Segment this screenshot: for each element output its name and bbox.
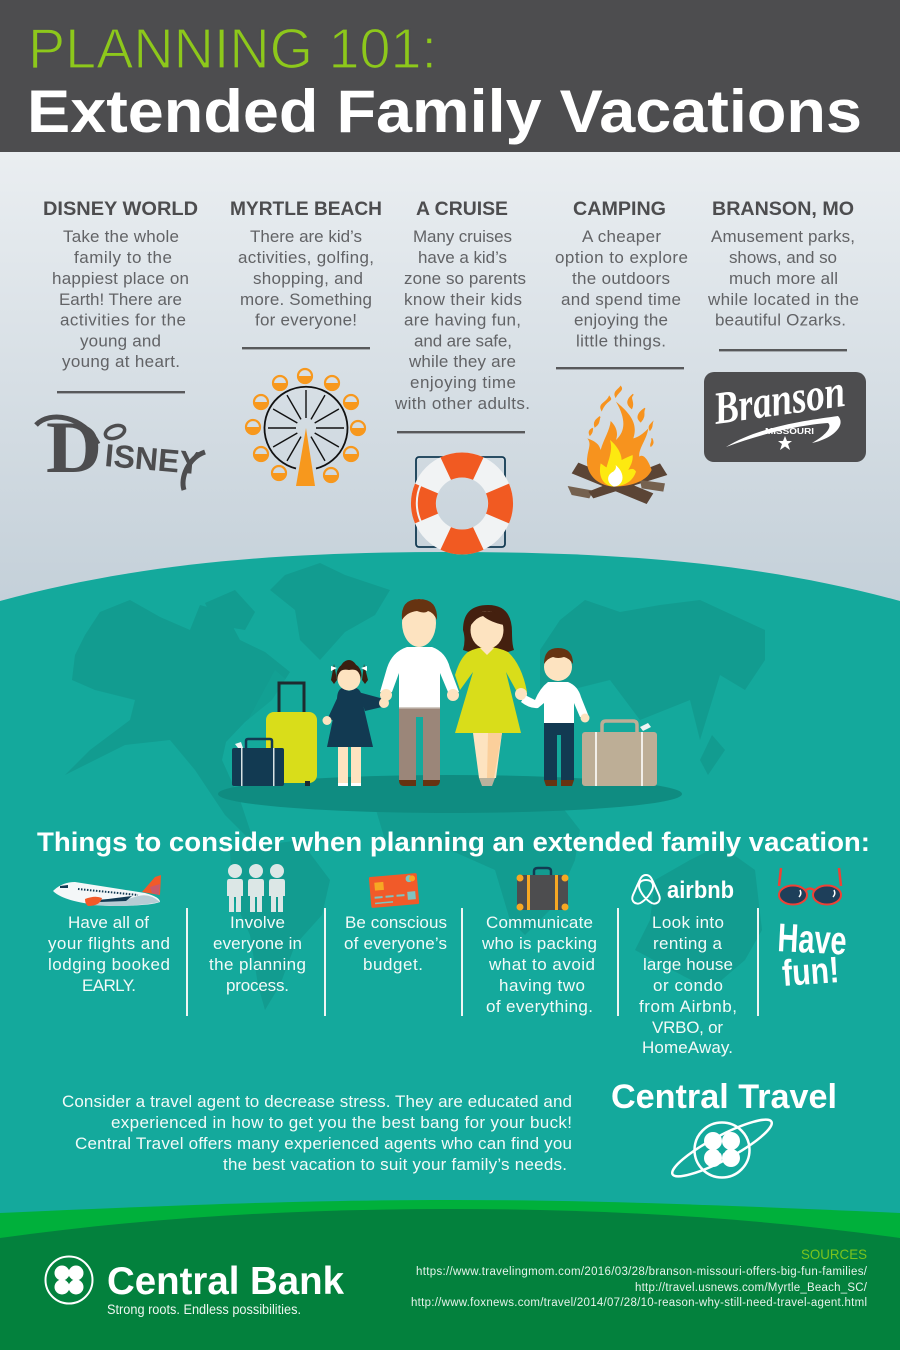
text block: activities, golfing, bbox=[238, 248, 374, 267]
ground shadow bbox=[218, 775, 682, 813]
text block: There are kid’s bbox=[250, 227, 362, 246]
text: Involve bbox=[230, 913, 285, 932]
heading: things to consider: Things to consider when planning an extended family vacation: bbox=[37, 827, 870, 857]
panel: A Cruise bbox=[394, 198, 530, 547]
panel: packing bbox=[481, 868, 597, 1016]
icon: life ring bbox=[416, 457, 505, 547]
panel: header bbox=[0, 0, 900, 152]
text block bbox=[555, 227, 688, 350]
text block: activities for the bbox=[60, 310, 186, 330]
beige suitcase bbox=[582, 721, 657, 786]
heading: MYRTLE BEACH bbox=[230, 198, 382, 220]
father bbox=[380, 599, 459, 786]
text: have fun: fun! bbox=[781, 949, 840, 994]
text block: enjoying time bbox=[410, 373, 516, 392]
text block: for everyone! bbox=[255, 310, 357, 330]
text block: more. Something bbox=[240, 290, 372, 309]
text: Look into bbox=[652, 913, 724, 932]
title line 1: PLANNING 101: bbox=[28, 17, 437, 81]
boy bbox=[516, 648, 590, 786]
icon: Disney logo: ISNEY bbox=[103, 437, 202, 481]
mother bbox=[455, 605, 527, 786]
sources: SOURCES bbox=[801, 1246, 867, 1262]
text: your flights and bbox=[48, 934, 170, 953]
text bbox=[48, 913, 170, 995]
text block bbox=[707, 227, 859, 330]
text block: are having fun, bbox=[404, 310, 521, 330]
icon: Disney logo bbox=[36, 407, 205, 490]
logo: Central Travel bbox=[611, 1078, 837, 1185]
text: of everything. bbox=[486, 997, 593, 1016]
text block: zone so parents bbox=[404, 269, 526, 288]
text: process. bbox=[226, 976, 289, 995]
text bbox=[209, 913, 306, 995]
text block: Earth! There are bbox=[59, 290, 182, 309]
text block: while they are bbox=[408, 352, 516, 371]
text block: shopping, and bbox=[253, 269, 363, 288]
text block: A cheaper bbox=[582, 227, 661, 246]
icon: credit card bbox=[369, 873, 419, 908]
heading: A CRUISE bbox=[416, 198, 508, 220]
heading: BRANSON, MO bbox=[712, 198, 854, 220]
text: large house bbox=[643, 955, 733, 974]
icon: airplane bbox=[53, 875, 161, 906]
text block bbox=[394, 227, 530, 413]
text block: while located in the bbox=[707, 290, 859, 309]
footer: green band bbox=[0, 1200, 900, 1350]
panel: budget bbox=[344, 873, 447, 974]
text block: Take the whole bbox=[63, 227, 179, 246]
text: lodging booked bbox=[48, 955, 170, 974]
icon: Branson logo: MISSOURI bbox=[765, 427, 814, 436]
panel: Camping bbox=[555, 198, 688, 504]
sources: https://www.travelingmom.com/2016/03/28/branson-missouri-offers-big-fun-families/ bbox=[416, 1266, 868, 1278]
title line 2: Extended Family Vacations bbox=[27, 78, 862, 145]
world map bbox=[65, 563, 765, 1010]
yellow suitcase bbox=[266, 683, 317, 786]
panel: involve everyone bbox=[209, 864, 306, 995]
text: have fun: Have bbox=[777, 916, 848, 964]
text: Be conscious bbox=[345, 913, 447, 932]
panel: Disney World bbox=[36, 198, 205, 490]
text bbox=[639, 913, 737, 1057]
callout: travel agent text: Central Travel offers many experienced agents who can find you bbox=[75, 1134, 572, 1153]
sources bbox=[411, 1246, 868, 1309]
text block: family to the bbox=[74, 248, 172, 267]
text block: have a kid’s bbox=[418, 248, 507, 267]
icon: Disney logo: D bbox=[46, 407, 102, 489]
text bbox=[481, 913, 597, 1016]
text block: beautiful Ozarks. bbox=[715, 310, 846, 330]
illustration: family with luggage bbox=[232, 599, 657, 786]
panel: Branson, MO bbox=[704, 198, 866, 462]
callout: travel agent text: Consider a travel agent to decrease stress. They are educated and bbox=[62, 1092, 572, 1111]
text block: and spend time bbox=[561, 290, 681, 309]
icon: Branson logo bbox=[704, 365, 866, 462]
panel: Myrtle Beach bbox=[230, 198, 382, 486]
navy suitcase bbox=[232, 739, 284, 786]
text block: little things. bbox=[576, 332, 666, 350]
text block: shows, and so bbox=[729, 248, 837, 267]
text bbox=[344, 913, 447, 974]
logo: Central Bank: Strong roots. Endless possibilities. bbox=[107, 1302, 301, 1317]
text block: young at heart. bbox=[62, 352, 180, 371]
icon: three people bbox=[227, 864, 285, 912]
text block: know their kids bbox=[404, 290, 522, 309]
text: have fun bbox=[777, 916, 848, 994]
text block: happiest place on bbox=[52, 269, 189, 288]
icon: ferris wheel bbox=[245, 369, 366, 486]
text: of everyone’s bbox=[344, 934, 447, 953]
logo: Central Bank bbox=[46, 1256, 344, 1317]
text: renting a bbox=[653, 934, 723, 953]
panel: book early bbox=[48, 875, 170, 995]
text: budget. bbox=[363, 955, 423, 974]
icon: campfire bbox=[568, 387, 667, 504]
callout: travel agent text: experienced in how to get you the best bang for your buck! bbox=[111, 1113, 572, 1132]
text: EARLY. bbox=[82, 976, 136, 995]
text block bbox=[238, 227, 374, 330]
logo: Central Bank: Central Bank bbox=[107, 1260, 344, 1303]
panel: teal section bbox=[0, 552, 900, 1230]
icon: airbnb logo: airbnb bbox=[667, 877, 734, 904]
text block: much more all bbox=[729, 269, 838, 288]
icon: sunglasses bbox=[779, 868, 841, 904]
text block: the outdoors bbox=[572, 269, 670, 288]
text block: with other adults. bbox=[394, 394, 530, 413]
text block: Many cruises bbox=[413, 227, 512, 246]
sources: http://www.foxnews.com/travel/2014/07/28/10-reason-why-still-need-travel-agent.html bbox=[411, 1297, 867, 1309]
text block: enjoying the bbox=[574, 310, 668, 330]
icon: airbnb logo bbox=[632, 875, 734, 904]
text block: Amusement parks, bbox=[711, 227, 855, 246]
text: VRBO, or bbox=[652, 1018, 723, 1037]
heading: DISNEY WORLD bbox=[43, 198, 198, 220]
text: Have all of bbox=[68, 913, 149, 932]
callout: travel agent text bbox=[62, 1092, 572, 1174]
text block: young and bbox=[80, 332, 161, 350]
background bbox=[0, 152, 900, 602]
text: the planning bbox=[209, 955, 306, 974]
heading: CAMPING bbox=[573, 198, 666, 220]
text: everyone in bbox=[213, 934, 302, 953]
girl bbox=[322, 660, 389, 786]
text block: option to explore bbox=[555, 248, 688, 267]
text: having two bbox=[499, 976, 585, 995]
text: from Airbnb, bbox=[639, 997, 737, 1016]
text block: and are safe, bbox=[414, 332, 512, 350]
text: who is packing bbox=[481, 934, 597, 953]
text: HomeAway. bbox=[642, 1038, 733, 1057]
callout: travel agent text: the best vacation to suit your family’s needs. bbox=[223, 1155, 567, 1174]
sources: http://travel.usnews.com/Myrtle_Beach_SC/ bbox=[635, 1282, 868, 1294]
panel: airbnb bbox=[632, 875, 737, 1057]
logo: Central Travel: Central Travel bbox=[611, 1078, 837, 1116]
text: Communicate bbox=[486, 913, 593, 932]
icon: Branson logo: Branson bbox=[709, 365, 848, 434]
panel: have fun bbox=[777, 868, 848, 994]
icon: suitcase bbox=[516, 868, 568, 910]
text block bbox=[52, 227, 189, 371]
text: what to avoid bbox=[488, 955, 595, 974]
text: or condo bbox=[653, 976, 723, 995]
